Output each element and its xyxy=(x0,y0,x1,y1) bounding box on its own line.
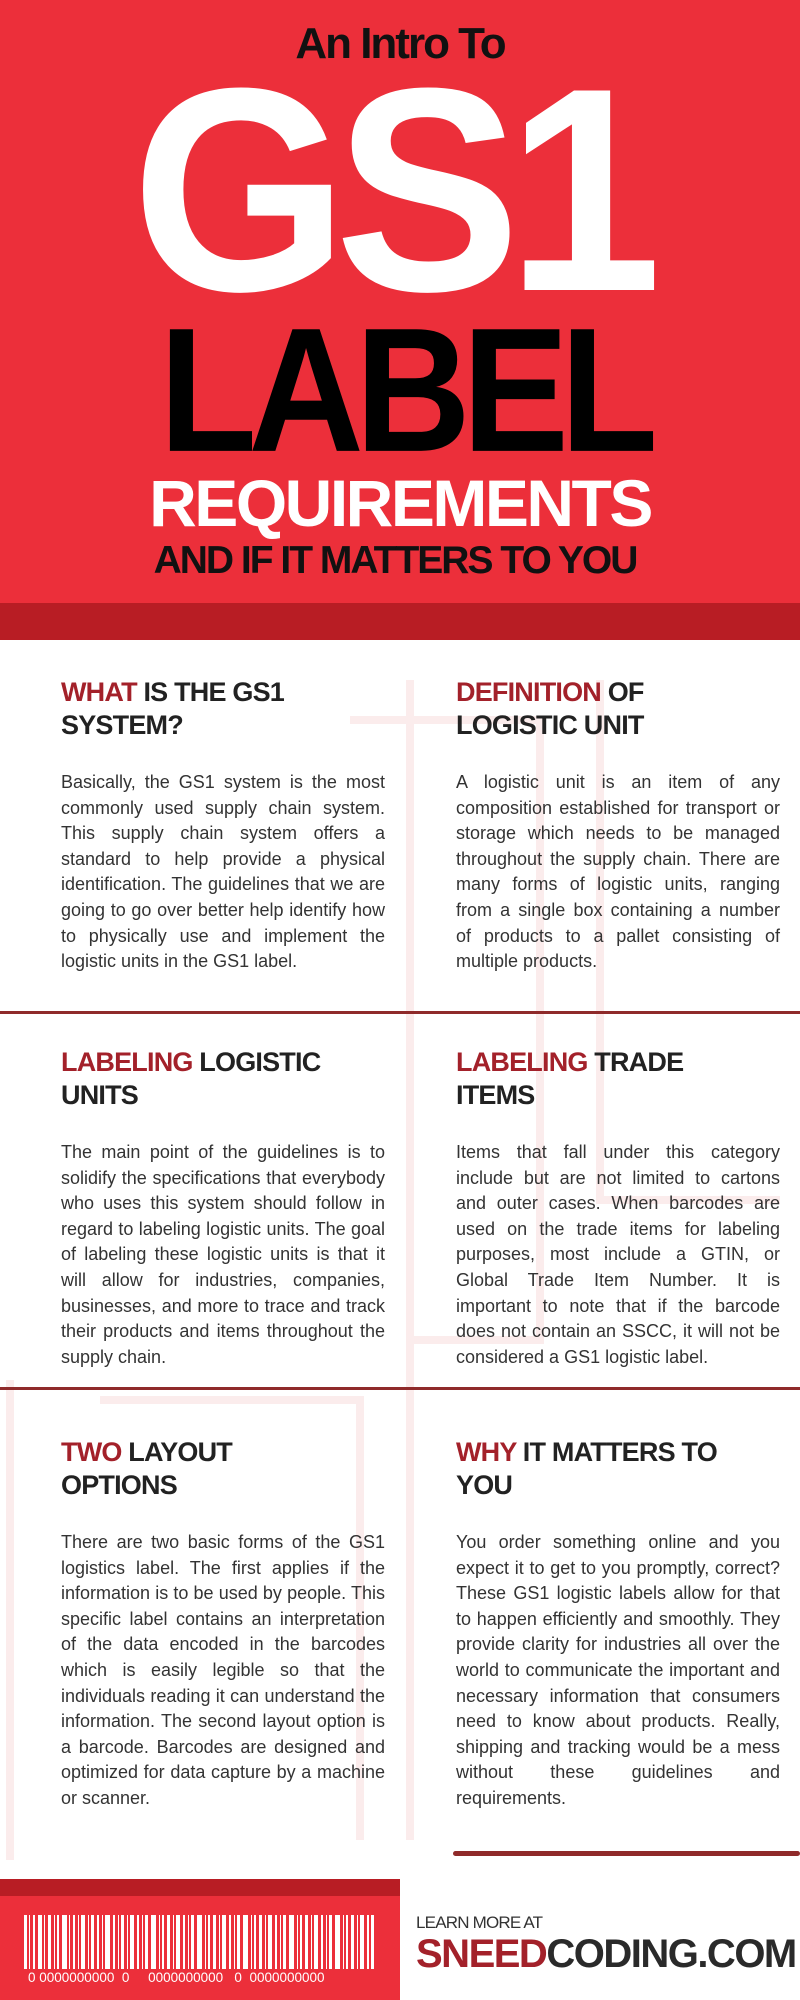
footer: learn more xyxy=(416,1913,796,1976)
heading: YOU xyxy=(456,1470,512,1500)
website: SNEEDCODING.COM xyxy=(416,1932,796,1976)
title: An Intro To: An Intro To xyxy=(295,19,505,68)
text: Basically, the GS1 system is the most commonly used supply chain system. This supply chain system offers a standard to help provide a physical identification. The guidelines that we are going to go over better help identify how to physically use and implement the logistic units in the GS1 label. xyxy=(61,772,385,971)
title: GS1: GS1 xyxy=(132,28,648,352)
panel: why it matters to you xyxy=(456,1437,780,1808)
title: LABEL: LABEL xyxy=(159,292,649,489)
heading: UNITS xyxy=(61,1080,138,1110)
text: A logistic unit is an item of any composition established for transport or storage which needs to be managed throughout the supply chain. There are many forms of logistic units, ranging from a single box containing a number of products to a pallet consisting of multiple products. xyxy=(456,772,780,971)
heading: TWO LAYOUT xyxy=(61,1437,232,1467)
heading: LABELING TRADE xyxy=(456,1047,683,1077)
text: There are two basic forms of the GS1 logistics label. The first applies if the information is to be used by people. This specific label contains an interpretation of the data encoded in the barcodes which is easily legible so that the individuals reading it can understand the information. The second layout option is a barcode. Barcodes are designed and optimized for data capture by a machine or scanner. xyxy=(61,1532,385,1808)
heading xyxy=(456,1047,684,1110)
heading xyxy=(456,677,644,740)
subtitle: AND IF IT MATTERS TO YOU xyxy=(154,539,636,582)
barcode digits: 0 0000000000 0 0000000000 0 0000000000 xyxy=(28,1970,325,1985)
label: LEARN MORE AT xyxy=(416,1913,542,1932)
icon: barcode xyxy=(24,1915,374,1969)
heading: ITEMS xyxy=(456,1080,535,1110)
text: The main point of the guidelines is to solidify the specifications that everybody who uses this system should follow in regard to labeling logistic units. The goal of labeling these logistic units is that it will allow for industries, companies, businesses, and more to trace and track their products and items throughout the supply chain. xyxy=(61,1142,385,1367)
text: You order something online and you expect it to get to you promptly, correct? These GS1 logistic labels allow for that to happen efficiently and smoothly. They provide clarity for industries all over the world to communicate the important and necessary information that consumers need to know about products. Really, shipping and tracking would be a mess without these guidelines and requirements. xyxy=(456,1532,780,1808)
heading: WHAT IS THE GS1 xyxy=(61,677,284,707)
panel: labeling trade items xyxy=(456,1047,780,1367)
heading xyxy=(61,1437,232,1500)
panel: definition of logistic unit xyxy=(456,677,780,971)
title: REQUIREMENTS: REQUIREMENTS xyxy=(149,466,651,540)
heading: OPTIONS xyxy=(61,1470,177,1500)
heading: LABELING LOGISTIC xyxy=(61,1047,320,1077)
header bottom band xyxy=(0,603,800,640)
heading: LOGISTIC UNIT xyxy=(456,710,644,740)
heading: SYSTEM? xyxy=(61,710,183,740)
panel: two layout options xyxy=(61,1437,385,1808)
decorative background lines xyxy=(6,680,780,1860)
header background xyxy=(0,0,800,640)
panel: labeling logistic units xyxy=(61,1047,385,1367)
heading: WHY IT MATTERS TO xyxy=(456,1437,717,1467)
panel: what is the GS1 system xyxy=(61,677,385,971)
heading: DEFINITION OF xyxy=(456,677,644,707)
heading xyxy=(61,677,284,740)
heading xyxy=(61,1047,320,1110)
footer: barcode panel xyxy=(0,1879,400,2000)
text: Items that fall under this category include but are not limited to cartons and outer cases. When barcodes are used on the trade items for labeling purposes, most include a GTIN, or Global Trade Item Number. It is important to note that if the barcode does not contain an SSCC, it will not be considered a GS1 logistic label. xyxy=(456,1142,780,1367)
heading xyxy=(456,1437,717,1500)
